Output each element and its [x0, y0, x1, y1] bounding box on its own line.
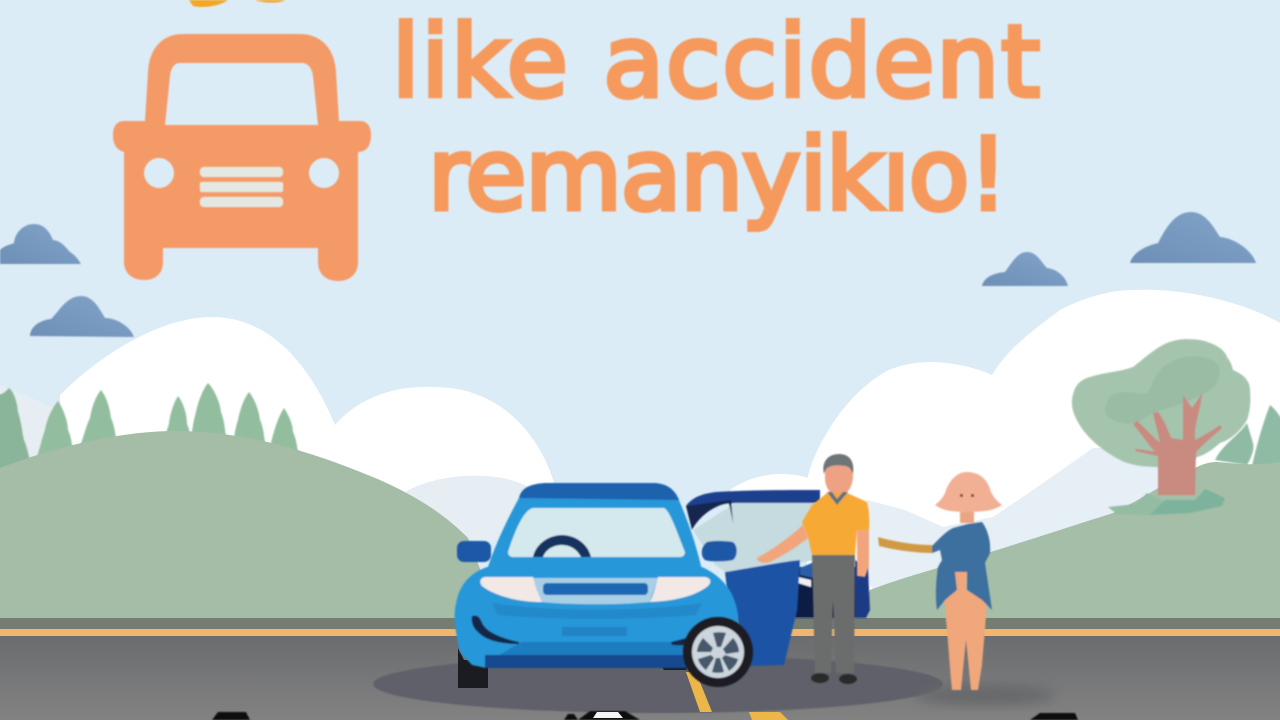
open door panel [725, 560, 800, 666]
title line 1: like accident [392, 5, 1040, 120]
man arm left [757, 525, 808, 563]
car hood and bumper [455, 567, 738, 668]
side mirror left [457, 541, 491, 562]
distant mountain: left foreground [405, 476, 545, 540]
white background hills: right [730, 290, 1280, 600]
grille surround [533, 578, 658, 604]
car: rear wheel [458, 648, 488, 688]
clouds [0, 212, 1256, 337]
side mirror right [702, 541, 737, 562]
man collar [827, 492, 848, 505]
cloud: center right [982, 252, 1068, 286]
green hill: left [0, 431, 500, 620]
lower grille [562, 627, 627, 636]
bushes at tree base [1108, 489, 1225, 515]
yellow lane markings [686, 672, 788, 720]
road [0, 618, 1280, 720]
white highlight on clipped shape [593, 712, 623, 718]
person: woman [878, 472, 1002, 690]
pine trees: right background [1215, 405, 1280, 475]
person: man [757, 454, 869, 684]
road surface [0, 636, 1280, 720]
distant pale mountains: left [0, 385, 120, 480]
man shoes [811, 673, 829, 683]
green hill: right [855, 462, 1280, 620]
woman legs [944, 590, 987, 690]
title line 2: remanyikıo! [428, 118, 1008, 233]
cloud: top right [1130, 212, 1256, 263]
woman face marks [960, 494, 974, 497]
car: blue body [455, 483, 738, 668]
windshield [508, 508, 685, 557]
man head [825, 455, 853, 496]
rear body [793, 567, 858, 618]
man trousers [812, 555, 855, 673]
steering wheel [533, 535, 591, 557]
woman hair [935, 472, 1002, 512]
orange road line [0, 629, 1280, 636]
lower bumper band [490, 642, 690, 660]
shadow under car and people [373, 655, 1055, 713]
man arm right [857, 528, 869, 577]
car: rear and open door [686, 490, 870, 666]
door pillar [686, 500, 733, 530]
icon: orange car [113, 34, 371, 281]
hood band [492, 603, 702, 619]
car roof [519, 483, 679, 500]
woman neck [960, 512, 974, 523]
cloud: lower left [30, 296, 134, 337]
car cabin [487, 498, 702, 570]
tree trunk [1133, 393, 1222, 495]
clipped black shapes at bottom edge [212, 711, 1078, 720]
woman arm [878, 537, 933, 553]
tree crown [1072, 339, 1250, 467]
icon: orange bow fragment at top [189, 0, 285, 7]
fog vent left [472, 616, 519, 644]
fog vent right [671, 634, 702, 646]
title [392, 5, 1040, 233]
distant mountain: right [860, 448, 1165, 600]
door frame [686, 490, 820, 506]
road verge [0, 618, 1280, 629]
grille [543, 583, 648, 595]
car: front wheel [683, 617, 753, 687]
woman knee patch [955, 572, 967, 598]
man shirt [802, 493, 869, 555]
door glass [693, 503, 815, 575]
headlights [480, 577, 542, 602]
white background hills: left [60, 317, 556, 520]
woman dress [932, 522, 992, 610]
pine trees: left [0, 383, 300, 470]
man hair [823, 454, 853, 474]
cloud: top left [0, 224, 81, 264]
